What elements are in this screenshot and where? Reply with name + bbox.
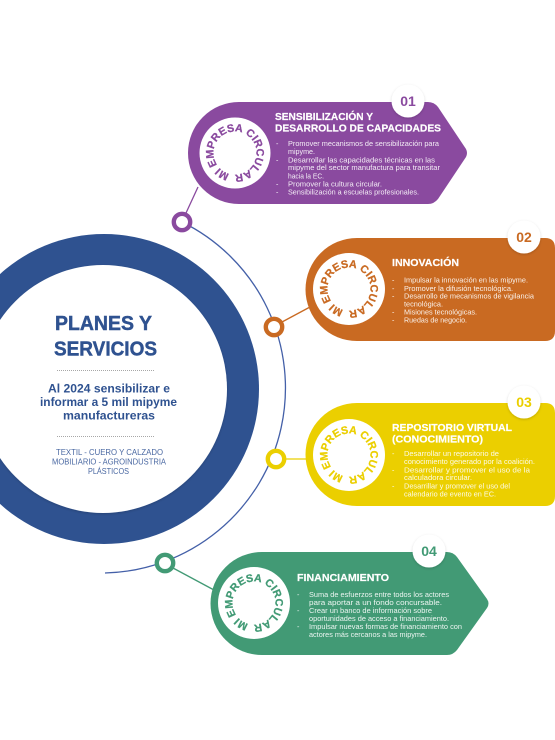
panel 02: innovación	[306, 226, 555, 341]
connector node 4	[157, 555, 214, 590]
connector node 1	[174, 187, 198, 230]
number 04	[412, 534, 446, 568]
heading: planes y servicios: SERVICIOS	[54, 338, 157, 360]
heading: planes y servicios	[54, 312, 157, 360]
sectors list: PLÁSTICOS	[88, 467, 129, 476]
body list: Impulsar nuevas formas de financiamiento con	[309, 622, 462, 631]
goal text: Al 2024 sensibilizar e	[48, 382, 170, 396]
connector node 2	[266, 307, 310, 335]
ring badge: MI EMPRESA CIRCULAR	[320, 260, 378, 318]
ring badge: MI EMPRESA CIRCULAR	[224, 574, 284, 632]
ring badge: MI EMPRESA CIRCULAR	[320, 426, 378, 484]
yellow shape	[306, 403, 555, 506]
body list: -	[392, 276, 395, 284]
body list: oportunidades de acceso a financiamiento.	[309, 614, 449, 623]
body list: Misiones tecnológicas.	[404, 308, 477, 316]
blue ring	[0, 234, 259, 544]
body list: Desarrollar un repositorio de	[404, 449, 499, 458]
body list: calendario de evento en EC.	[404, 490, 496, 498]
body list: -	[297, 622, 300, 631]
body list: Crear un banco de información sobre	[309, 606, 432, 615]
heading	[275, 110, 441, 134]
body list: -	[297, 590, 300, 599]
panel 04: financiamiento	[210, 540, 488, 655]
panel 01: sensibilización	[188, 90, 467, 204]
green arrow shape	[210, 552, 488, 655]
body list: Promover la cultura circular.	[288, 180, 382, 188]
body list: -	[276, 156, 279, 164]
heading: (CONOCIMIENTO)	[392, 434, 483, 446]
body list: mipyme del sector manufactura para transitar	[288, 163, 441, 172]
number 02	[508, 220, 540, 254]
number 04: 04	[421, 543, 437, 559]
purple arrow shape	[188, 102, 467, 204]
body list: conocimiento generado por la coalición.	[404, 457, 535, 466]
body list: Desarrollo de mecanismos de vigilancia	[404, 292, 534, 300]
heading: FINANCIAMIENTO	[297, 572, 389, 584]
goal text	[40, 382, 177, 422]
heading: SENSIBILIZACIÓN Y	[275, 110, 373, 123]
ring badge: MI EMPRESA CIRCULAR	[206, 124, 264, 182]
body list: -	[276, 139, 279, 148]
heading: REPOSITORIO VIRTUAL	[392, 422, 513, 434]
central circle	[0, 234, 259, 544]
body list: -	[392, 316, 395, 324]
body list: Promover mecanismos de sensibilización para	[288, 139, 439, 148]
sectors list: MOBILIARIO - AGROINDUSTRIA	[52, 458, 167, 466]
body list: -	[392, 466, 395, 474]
body list: Impulsar la innovación en las mipyme.	[404, 276, 528, 284]
sectors list	[52, 448, 167, 476]
white disc	[0, 265, 227, 513]
connector node 3	[268, 451, 308, 467]
body list: Desarrollar las capacidades técnicas en las	[288, 156, 435, 164]
sectors list: TEXTIL - CUERO Y CALZADO	[56, 448, 163, 457]
body list: -	[392, 308, 395, 316]
heading: planes y servicios: PLANES Y	[55, 312, 152, 335]
panel 03: repositorio virtual	[306, 392, 555, 506]
body list	[276, 139, 441, 196]
number 03	[508, 386, 540, 418]
body list: -	[276, 180, 279, 188]
heading: DESARROLLO DE CAPACIDADES	[275, 122, 441, 134]
body list: Sensibilización a escuelas profesionales.	[288, 188, 419, 196]
body list: Desarrollar y promover el uso de la	[404, 466, 530, 474]
thin orbit arc	[105, 222, 285, 573]
body list: actores más cercanos a las mipyme.	[309, 630, 427, 639]
body list: -	[392, 482, 395, 490]
body list: para aportar a un fondo concursable.	[309, 598, 442, 607]
body list: -	[392, 292, 395, 300]
body list	[297, 590, 462, 639]
body list: Desarrillar y promover el uso del	[404, 482, 510, 490]
body list: -	[392, 284, 395, 293]
body list	[392, 449, 535, 498]
number 01	[392, 84, 424, 118]
body list: Suma de esfuerzos entre todos los actores	[309, 590, 449, 599]
body list: -	[297, 606, 300, 615]
orange shape	[306, 238, 555, 341]
body list: -	[392, 449, 395, 458]
number 01: 01	[400, 93, 416, 109]
goal text: informar a 5 mil mipyme	[40, 395, 177, 409]
number 02: 02	[516, 229, 532, 245]
body list: calculadora circular.	[404, 473, 472, 482]
goal text: manufactureras	[63, 408, 155, 422]
heading	[392, 422, 513, 446]
body list: tecnológica.	[404, 300, 443, 308]
body list: Ruedas de negocio.	[404, 316, 467, 324]
body list: mipyme.	[288, 147, 315, 156]
body list: -	[276, 188, 279, 196]
number 03: 03	[516, 394, 532, 410]
body list: Promover la difusión tecnológica.	[404, 284, 513, 293]
body list	[392, 276, 534, 324]
body list: hacia la EC.	[288, 172, 324, 180]
heading: INNOVACIÓN	[392, 256, 459, 269]
